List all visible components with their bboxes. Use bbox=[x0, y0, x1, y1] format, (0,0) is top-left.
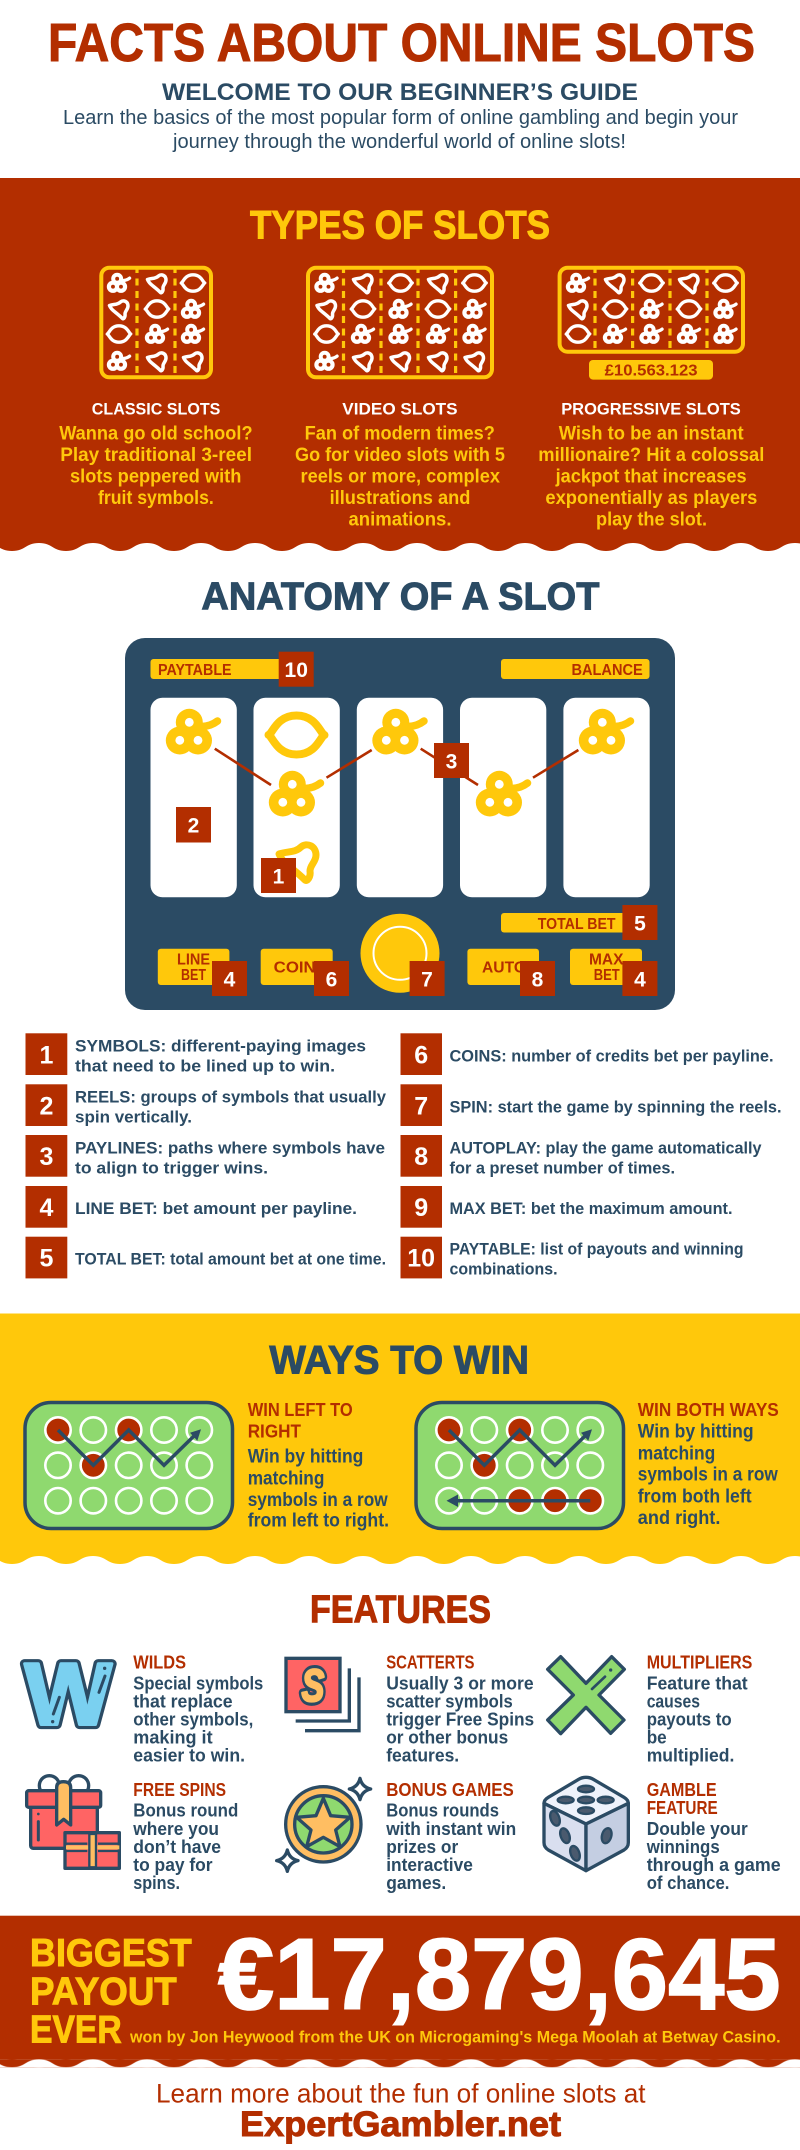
diagram: win left to right bbox=[25, 1402, 232, 1528]
text: progressive slots: Wish to be an instant bbox=[559, 423, 744, 444]
text: bonus games bbox=[385, 1780, 516, 1893]
legend item 7: SPIN: start the game by spinning the reels. bbox=[450, 1097, 782, 1116]
text: win left to right: from left to right. bbox=[248, 1511, 389, 1532]
number badges: 4 bbox=[634, 968, 646, 992]
button: line bet: BET bbox=[181, 967, 206, 984]
footer site name: ExpertGambler.net bbox=[240, 2104, 561, 2144]
text: scatters: Usually 3 or more bbox=[386, 1673, 534, 1693]
button: spin bbox=[360, 914, 440, 993]
legend item 3: to align to trigger wins. bbox=[75, 1158, 268, 1177]
text: gamble feature: Double your bbox=[647, 1819, 748, 1839]
text: win both ways bbox=[638, 1399, 779, 1529]
text: wilds: other symbols, bbox=[133, 1710, 253, 1730]
legend item 10: PAYTABLE: list of payouts and winning bbox=[450, 1239, 744, 1258]
text: scatters: or other bonus bbox=[386, 1728, 508, 1748]
text: progressive slots: PROGRESSIVE SLOTS bbox=[561, 399, 741, 418]
legend item 8: 8 bbox=[414, 1143, 428, 1171]
legend item 8 bbox=[400, 1135, 762, 1177]
legend item 3: PAYLINES: paths where symbols have bbox=[75, 1138, 385, 1157]
number badges: 3 bbox=[446, 750, 457, 774]
heading: ways to win: WAYS TO WIN bbox=[269, 1338, 529, 1382]
text: win both ways: symbols in a row bbox=[638, 1465, 778, 1486]
icon: scatter cards: S bbox=[302, 1660, 324, 1711]
text: bonus games: BONUS GAMES bbox=[386, 1780, 514, 1800]
text: bonus games: Bonus rounds bbox=[386, 1801, 499, 1821]
biggest payout label: BIGGEST bbox=[30, 1932, 192, 1975]
footer text: Learn more about the fun of online slots at bbox=[156, 2079, 646, 2109]
text: gamble feature: GAMBLE bbox=[647, 1780, 717, 1800]
text: scatters: scatter symbols bbox=[386, 1692, 513, 1712]
icon: wilds W: W bbox=[25, 1645, 113, 1744]
intro text bbox=[63, 107, 738, 153]
legend item 1: that need to be lined up to win. bbox=[75, 1057, 335, 1076]
icon: classic slot grid bbox=[101, 266, 211, 379]
text: bonus games: prizes or bbox=[386, 1837, 458, 1857]
slot machine diagram bbox=[125, 638, 675, 1010]
icon: multiplier X bbox=[548, 1657, 624, 1734]
legend item 1: SYMBOLS: different-paying images bbox=[75, 1037, 366, 1056]
icon: scatter cards: S bbox=[302, 1660, 324, 1711]
legend item 6: COINS: number of credits bet per payline. bbox=[450, 1046, 774, 1065]
text: video slots bbox=[295, 399, 505, 531]
legend item 2: spin vertically. bbox=[75, 1107, 192, 1126]
button: max bet: BET bbox=[594, 967, 620, 984]
number badges: 8 bbox=[532, 968, 544, 992]
text: free spins bbox=[132, 1780, 238, 1893]
total bet bar: TOTAL BET bbox=[538, 916, 616, 933]
text: wilds: easier to win. bbox=[133, 1746, 245, 1766]
text: bonus games: interactive bbox=[386, 1855, 473, 1875]
button: line bet bbox=[158, 949, 229, 985]
text: win left to right: symbols in a row bbox=[248, 1490, 388, 1511]
text: multipliers bbox=[647, 1652, 752, 1766]
icon: progressive slot grid bbox=[560, 266, 743, 353]
legend item 8: AUTOPLAY: play the game automatically bbox=[450, 1138, 762, 1157]
text: classic slots: Wanna go old school? bbox=[59, 423, 253, 444]
text: multipliers: Feature that bbox=[647, 1673, 748, 1693]
text: progressive slots: play the slot. bbox=[596, 510, 707, 531]
button: auto bbox=[467, 949, 539, 985]
text: wilds: WILDS bbox=[133, 1652, 186, 1672]
legend item 4: LINE BET: bet amount per payline. bbox=[75, 1199, 357, 1218]
icon: scatter cards bbox=[286, 1658, 359, 1731]
jackpot counter bbox=[589, 360, 713, 380]
icon: video slot grid bbox=[308, 266, 492, 379]
number badges: 1 bbox=[273, 866, 285, 888]
legend item 8: for a preset number of times. bbox=[450, 1158, 675, 1177]
legend item 10: combinations. bbox=[450, 1260, 558, 1279]
legend item 1 bbox=[26, 1033, 366, 1076]
text: video slots: animations. bbox=[348, 510, 452, 531]
panel: types of slots bbox=[0, 178, 800, 551]
text: win both ways: and right. bbox=[638, 1508, 720, 1529]
icon: bonus coin with star bbox=[277, 1778, 371, 1871]
text: gamble feature: winnings bbox=[646, 1837, 720, 1857]
text: progressive slots bbox=[538, 399, 764, 531]
subtitle: WELCOME TO OUR BEGINNER’S GUIDE bbox=[162, 79, 638, 106]
number badges: 4 bbox=[224, 968, 236, 992]
legend item 9 bbox=[400, 1186, 732, 1228]
heading: types of slots: TYPES OF SLOTS bbox=[250, 204, 550, 248]
panel: ways to win bbox=[0, 1314, 800, 1564]
text: scatters: SCATTERTS bbox=[386, 1652, 474, 1672]
text: free spins: FREE SPINS bbox=[133, 1780, 226, 1800]
intro text: Learn the basics of the most popular form of online gambling and begin your bbox=[63, 107, 738, 129]
payout amount: €17,879,645 bbox=[218, 1919, 781, 2031]
text: gamble feature: FEATURE bbox=[647, 1798, 718, 1818]
reels bbox=[150, 698, 650, 897]
text: classic slots: Play traditional 3-reel bbox=[60, 445, 252, 466]
text: multipliers: causes bbox=[647, 1692, 700, 1712]
paylines bbox=[215, 749, 578, 785]
heading: features: FEATURES bbox=[310, 1589, 491, 1632]
number badges bbox=[176, 652, 657, 996]
legend item 2 bbox=[26, 1084, 387, 1126]
text: classic slots: fruit symbols. bbox=[98, 488, 214, 509]
button: coin bbox=[261, 949, 333, 985]
legend item 10 bbox=[400, 1237, 744, 1279]
legend item 4 bbox=[26, 1186, 357, 1228]
text: win left to right: matching bbox=[248, 1468, 324, 1489]
legend item 5: TOTAL BET: total amount bet at one time. bbox=[75, 1249, 386, 1268]
text: classic slots: CLASSIC SLOTS bbox=[92, 399, 220, 418]
text: win both ways: from both left bbox=[638, 1486, 752, 1507]
legend item 7: 7 bbox=[414, 1092, 428, 1120]
legend item 9: MAX BET: bet the maximum amount. bbox=[450, 1199, 732, 1218]
text: free spins: where you bbox=[132, 1819, 219, 1839]
number badges: 2 bbox=[188, 814, 199, 838]
biggest payout label: PAYOUT bbox=[30, 1970, 177, 2013]
legend item 1: 1 bbox=[39, 1041, 53, 1069]
icon: dice bbox=[544, 1777, 628, 1871]
legend item 5: 5 bbox=[39, 1245, 53, 1273]
legend item 3: 3 bbox=[39, 1143, 53, 1171]
legend item 10: 10 bbox=[407, 1245, 435, 1273]
text: bonus games: with instant win bbox=[385, 1819, 516, 1839]
text: win left to right: WIN LEFT TO bbox=[248, 1399, 353, 1420]
button: max bet bbox=[570, 949, 642, 985]
text: wilds: Special symbols bbox=[133, 1673, 263, 1693]
text: bonus games: games. bbox=[386, 1873, 446, 1893]
jackpot counter: £10.563.123 bbox=[605, 362, 698, 380]
text: wilds bbox=[133, 1652, 263, 1766]
text: gamble feature: of chance. bbox=[647, 1873, 729, 1893]
button: auto: AUTO bbox=[482, 960, 526, 977]
payout winner detail: won by Jon Heywood from the UK on Microgaming's Mega Moolah at Betway Casino. bbox=[129, 2027, 781, 2046]
legend item 6: 6 bbox=[414, 1041, 428, 1069]
legend item 2: 2 bbox=[39, 1092, 53, 1120]
text: multipliers: multiplied. bbox=[647, 1746, 734, 1766]
text: scatters: trigger Free Spins bbox=[386, 1710, 534, 1730]
text: win left to right bbox=[248, 1399, 389, 1532]
text: win left to right: RIGHT bbox=[248, 1421, 302, 1442]
text: win both ways: Win by hitting bbox=[638, 1421, 754, 1442]
text: classic slots: slots peppered with bbox=[70, 466, 241, 488]
legend item 4: 4 bbox=[39, 1194, 53, 1222]
balance bar: BALANCE bbox=[572, 662, 643, 679]
text: multipliers: be bbox=[647, 1728, 667, 1748]
text: multipliers: MULTIPLIERS bbox=[647, 1652, 752, 1672]
text: video slots: Fan of modern times? bbox=[305, 423, 495, 444]
text: video slots: reels or more, complex bbox=[300, 466, 500, 488]
symbols on reels bbox=[166, 709, 631, 880]
total bet bar bbox=[501, 913, 641, 933]
paytable bar bbox=[150, 659, 290, 679]
text: win left to right: Win by hitting bbox=[248, 1447, 363, 1468]
number badges: 7 bbox=[421, 968, 433, 992]
number badges: 6 bbox=[326, 968, 337, 992]
legend item 3 bbox=[26, 1135, 385, 1177]
legend item 2: REELS: groups of symbols that usually bbox=[75, 1087, 387, 1106]
number badges: 5 bbox=[634, 912, 646, 936]
text: wilds: that replace bbox=[133, 1692, 233, 1712]
icon: wilds W: W bbox=[25, 1645, 113, 1744]
text: video slots: illustrations and bbox=[330, 488, 470, 509]
icon: gift boxes bbox=[27, 1776, 119, 1868]
button: coin: COIN bbox=[274, 960, 316, 977]
text: scatters bbox=[386, 1652, 534, 1766]
paytable bar: PAYTABLE bbox=[158, 662, 232, 679]
biggest payout label: EVER bbox=[30, 2008, 122, 2051]
text: progressive slots: exponentially as players bbox=[545, 488, 757, 509]
intro text: journey through the wonderful world of online slots! bbox=[172, 131, 626, 153]
biggest payout label bbox=[30, 1932, 192, 2051]
text: video slots: Go for video slots with 5 bbox=[295, 445, 505, 466]
text: gamble feature: through a game bbox=[647, 1855, 781, 1875]
panel: biggest payout bbox=[0, 1916, 800, 2067]
text: progressive slots: jackpot that increases bbox=[555, 466, 747, 488]
text: multipliers: payouts to bbox=[647, 1710, 732, 1730]
legend item 7 bbox=[400, 1084, 782, 1126]
text: gamble feature bbox=[646, 1780, 781, 1893]
text: free spins: Bonus round bbox=[133, 1801, 238, 1821]
text: classic slots bbox=[59, 399, 253, 509]
button: line bet: LINE bbox=[177, 952, 210, 969]
text: progressive slots: millionaire? Hit a colossal bbox=[538, 445, 764, 466]
text: video slots: VIDEO SLOTS bbox=[342, 399, 458, 418]
text: win both ways: WIN BOTH WAYS bbox=[638, 1399, 779, 1420]
text: wilds: making it bbox=[133, 1728, 213, 1748]
legend item 5 bbox=[26, 1237, 386, 1278]
text: scatters: features. bbox=[386, 1746, 459, 1766]
text: free spins: spins. bbox=[133, 1873, 180, 1893]
text: free spins: to pay for bbox=[133, 1855, 213, 1875]
text: free spins: don’t have bbox=[133, 1837, 221, 1857]
button: max bet: MAX bbox=[589, 952, 624, 969]
legend item 6 bbox=[400, 1033, 774, 1075]
text: win both ways: matching bbox=[638, 1443, 715, 1464]
balance bar bbox=[501, 659, 650, 679]
legend item 9: 9 bbox=[414, 1194, 428, 1222]
legend bbox=[26, 1033, 782, 1279]
heading: anatomy of a slot: ANATOMY OF A SLOT bbox=[201, 576, 600, 618]
diagram: win both ways bbox=[416, 1402, 624, 1528]
number badges: 10 bbox=[285, 659, 308, 682]
